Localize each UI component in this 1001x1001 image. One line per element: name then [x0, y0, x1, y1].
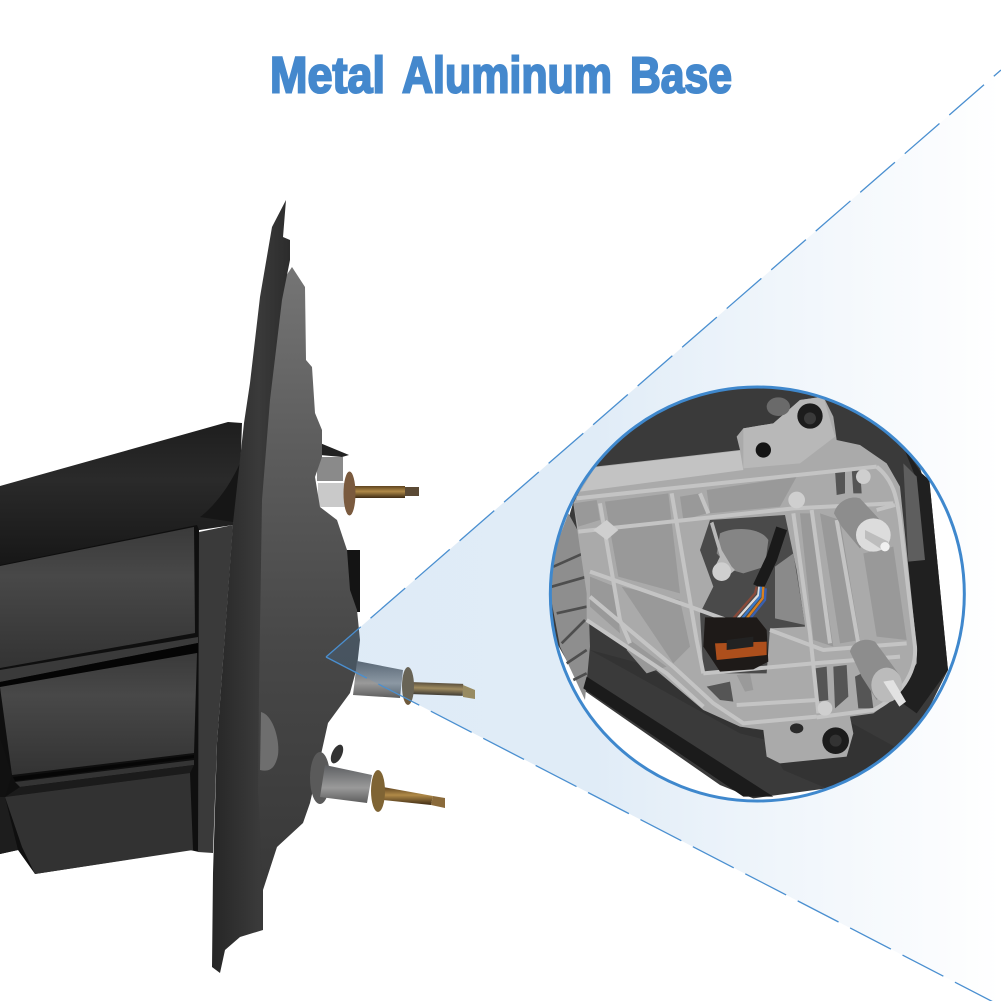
cone dashed edges	[326, 70, 1001, 1001]
cone fill	[326, 70, 1001, 1001]
lens ring	[550, 387, 964, 801]
title	[270, 48, 732, 104]
wire connector	[703, 617, 768, 672]
inner gray boss	[717, 529, 768, 573]
round casting bosses	[593, 469, 871, 716]
screws	[756, 403, 849, 754]
center hole	[700, 515, 805, 673]
aluminum base plate	[250, 267, 360, 890]
gray top rivet	[767, 397, 790, 416]
black cable	[758, 528, 782, 587]
black connector block	[345, 550, 360, 612]
casting ribs	[577, 467, 915, 723]
mirror side view	[0, 200, 475, 973]
right gray clip	[903, 463, 925, 562]
magnified aluminum base circle	[540, 380, 964, 801]
lens background	[558, 504, 820, 800]
mounting boss 2	[850, 640, 906, 707]
bolt 2	[353, 661, 475, 705]
title: Metal	[270, 48, 385, 104]
magnification cone	[326, 70, 1001, 1001]
connector tab	[737, 673, 753, 692]
title: Aluminum	[402, 48, 612, 104]
gray stem	[710, 522, 735, 580]
bolt 1 with bracket	[317, 443, 419, 516]
bolt 3	[310, 743, 445, 812]
lower dark recess	[590, 650, 907, 788]
title: Base	[630, 48, 732, 104]
mounting boss 1	[834, 497, 891, 552]
colored wires	[733, 587, 766, 619]
lower hole fill	[775, 553, 805, 625]
lens interior	[540, 380, 964, 801]
right dark edge	[900, 452, 948, 714]
left finned part	[550, 513, 590, 700]
aluminum casting outline	[573, 397, 917, 763]
small corner recesses	[707, 468, 873, 708]
mirror housing	[0, 422, 242, 874]
plate dent	[260, 712, 278, 771]
outer flange	[212, 200, 290, 973]
dark mirror back	[540, 380, 948, 798]
left recess panels	[573, 477, 907, 673]
lower left black strip	[583, 677, 773, 797]
top ear highlight	[743, 397, 835, 468]
upper bar highlight	[580, 451, 743, 492]
